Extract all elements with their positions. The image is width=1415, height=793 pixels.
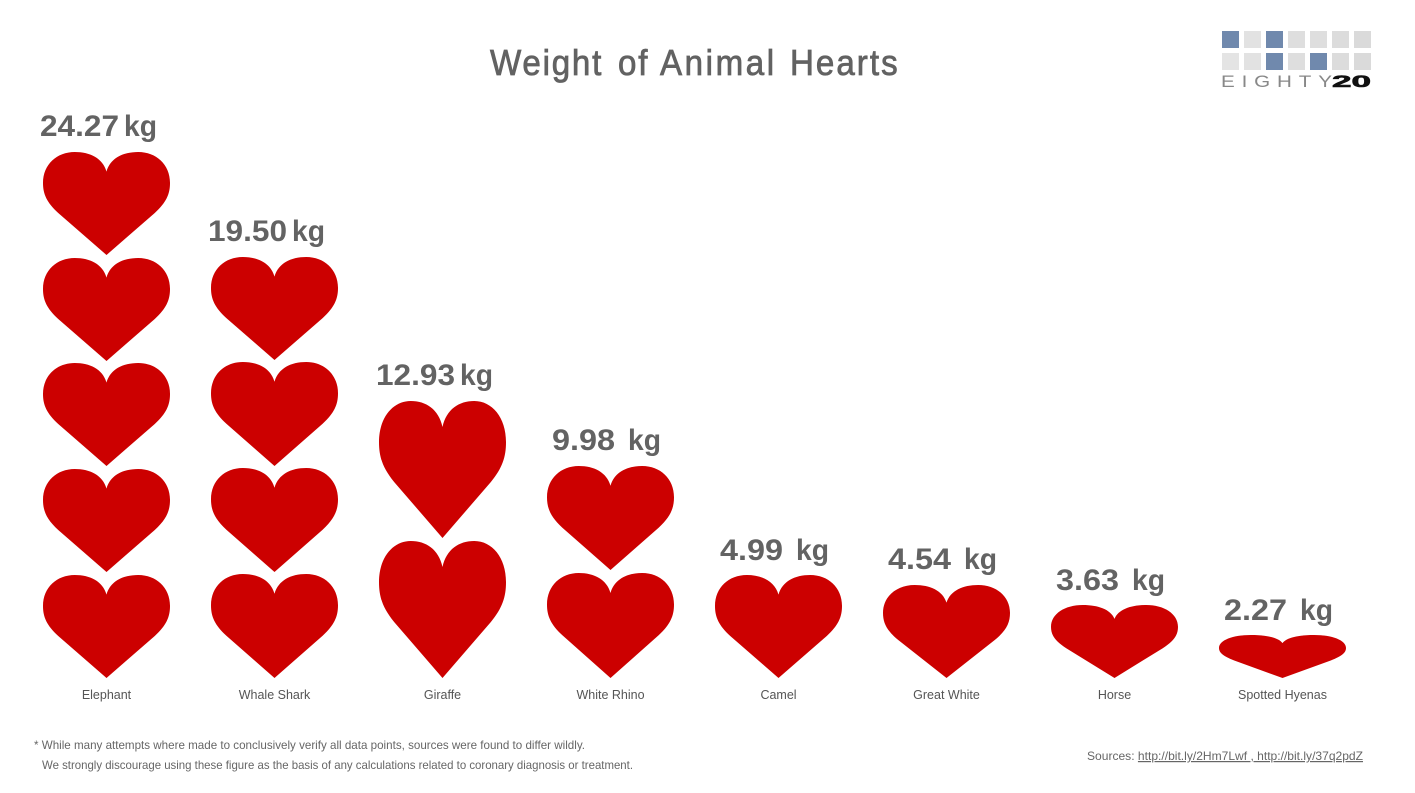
column: Whale Shark xyxy=(208,215,338,702)
label: Camel: Camel xyxy=(760,688,797,702)
hearts: White Rhino xyxy=(547,466,674,678)
value: Great White: 4.54 xyxy=(888,543,951,576)
label: Whale Shark: Whale Shark xyxy=(239,688,311,702)
value: Camel: kg xyxy=(796,534,829,567)
hearts: Giraffe xyxy=(379,401,506,678)
value: Horse: 3.63 xyxy=(1056,564,1119,597)
value: Spotted Hyenas: kg xyxy=(1300,594,1333,627)
title: Weight xyxy=(490,44,602,83)
heart: Spotted Hyenas xyxy=(1219,635,1346,678)
heart: Great White xyxy=(883,585,1010,678)
value: Whale Shark: kg xyxy=(292,215,325,248)
value: Horse: kg xyxy=(1132,564,1165,597)
column: Elephant xyxy=(40,110,170,702)
label: Giraffe: Giraffe xyxy=(424,688,461,702)
heart: Horse xyxy=(1051,605,1178,678)
hearts: Whale Shark xyxy=(211,257,338,678)
logo: Eighty20 xyxy=(1221,31,1371,91)
title xyxy=(490,44,898,83)
title: of xyxy=(618,44,648,83)
label: Horse: Horse xyxy=(1098,688,1131,702)
value: White Rhino: 9.98 xyxy=(552,424,615,457)
footnote: * While many attempts where made to conclusively verify all data points, sources were found to differ wildly. xyxy=(34,738,585,752)
label: Spotted Hyenas: Spotted Hyenas xyxy=(1238,688,1327,702)
column: Giraffe xyxy=(376,359,506,702)
logo: Eighty20: EIGHTY xyxy=(1221,72,1333,91)
title: Animal xyxy=(660,44,774,83)
sources: Sources: http://bit.ly/2Hm7Lwf , http://bit.ly/37q2pdZ xyxy=(1087,749,1363,763)
column: Camel xyxy=(715,534,842,702)
value: White Rhino: kg xyxy=(628,424,661,457)
title: Hearts xyxy=(790,44,898,83)
value: Giraffe: 12.93 xyxy=(376,359,455,392)
value: Elephant: 24.27 xyxy=(40,110,119,143)
label: Elephant: Elephant xyxy=(82,688,132,702)
column: Great White xyxy=(883,543,1010,702)
value: Elephant: kg xyxy=(124,110,157,143)
label: White Rhino: White Rhino xyxy=(576,688,645,702)
column: White Rhino xyxy=(547,424,674,702)
label: Great White: Great White xyxy=(913,688,980,702)
column: Horse xyxy=(1051,564,1178,702)
footnote: We strongly discourage using these figure as the basis of any calculations related to coronary diagnosis or treatment. xyxy=(42,758,633,772)
column: Spotted Hyenas xyxy=(1219,594,1346,702)
heart: Camel xyxy=(715,575,842,678)
value: Great White: kg xyxy=(964,543,997,576)
footnote xyxy=(34,738,633,772)
value: Camel: 4.99 xyxy=(720,534,783,567)
value: Giraffe: kg xyxy=(460,359,493,392)
hearts: Elephant xyxy=(43,152,170,678)
logo: Eighty20: 20 xyxy=(1332,73,1371,91)
value: Whale Shark: 19.50 xyxy=(208,215,287,248)
value: Spotted Hyenas: 2.27 xyxy=(1224,594,1287,627)
